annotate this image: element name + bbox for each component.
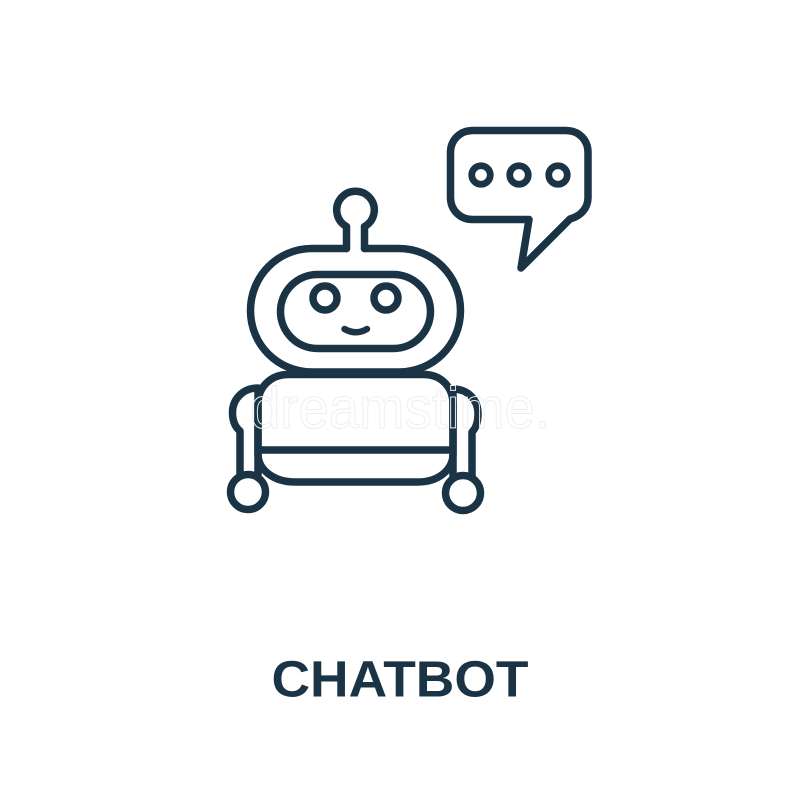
right arm (453, 389, 478, 476)
robot face screen (280, 274, 430, 348)
bubble outline (450, 130, 588, 268)
icon: robot (230, 191, 480, 510)
robot body (258, 374, 453, 482)
robot head (250, 248, 460, 372)
smile (344, 329, 367, 332)
title: CHATBOT (272, 650, 528, 708)
right hand (446, 476, 480, 510)
robot antenna (337, 191, 374, 248)
typing dots (472, 166, 567, 184)
left eye (313, 286, 337, 310)
watermark: dreamstime. (250, 376, 550, 441)
right eye (374, 286, 398, 310)
left hand (230, 474, 266, 510)
left arm (232, 388, 258, 475)
icon: speech bubble (450, 130, 588, 268)
